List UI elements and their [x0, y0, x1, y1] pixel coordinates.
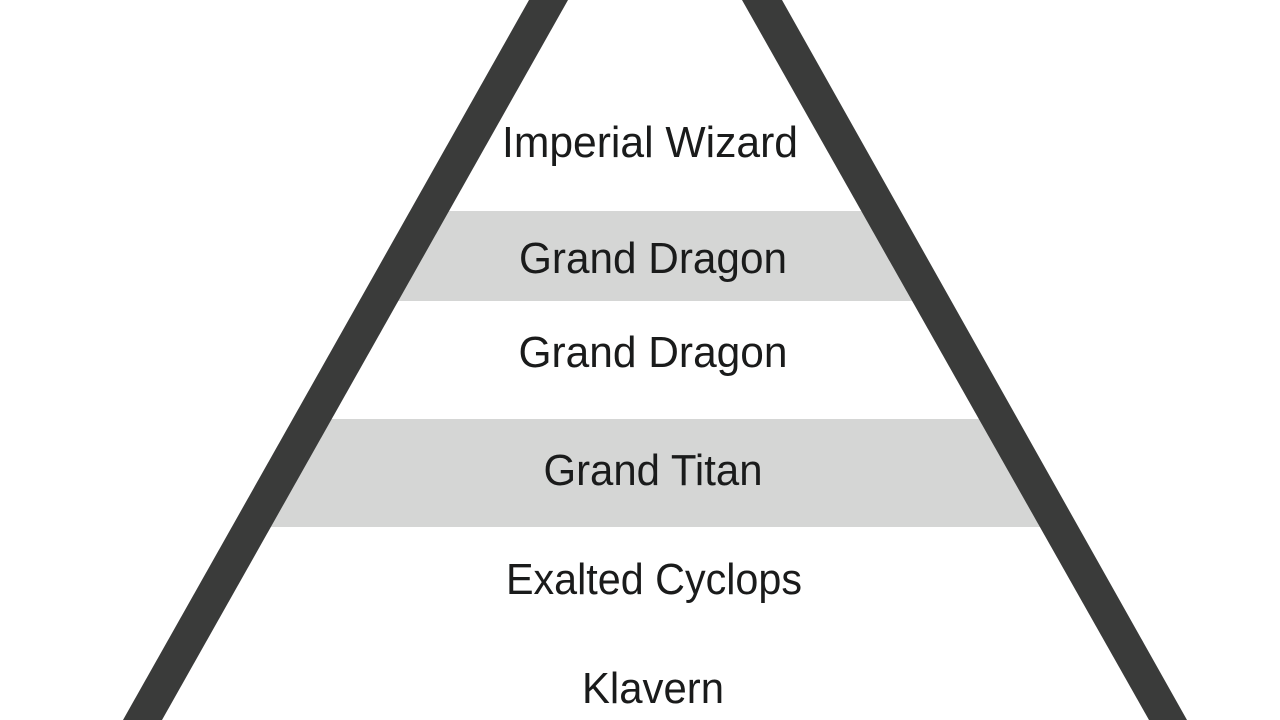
label: Imperial Wizard: Imperial Wizard: [502, 118, 798, 167]
pyramid left side: [123, 0, 568, 720]
label: Grand Dragon lower: Grand Dragon: [518, 328, 788, 377]
band: Grand Titan shading: [268, 419, 1043, 527]
label: Grand Dragon upper: Grand Dragon: [519, 234, 787, 283]
label: Grand Titan: Grand Titan: [544, 446, 762, 495]
label: Exalted Cyclops: Exalted Cyclops: [506, 555, 802, 604]
label: Klavern: Klavern: [582, 664, 724, 713]
pyramid right side: [742, 0, 1187, 720]
band: Grand Dragon (upper) shading: [394, 211, 918, 301]
